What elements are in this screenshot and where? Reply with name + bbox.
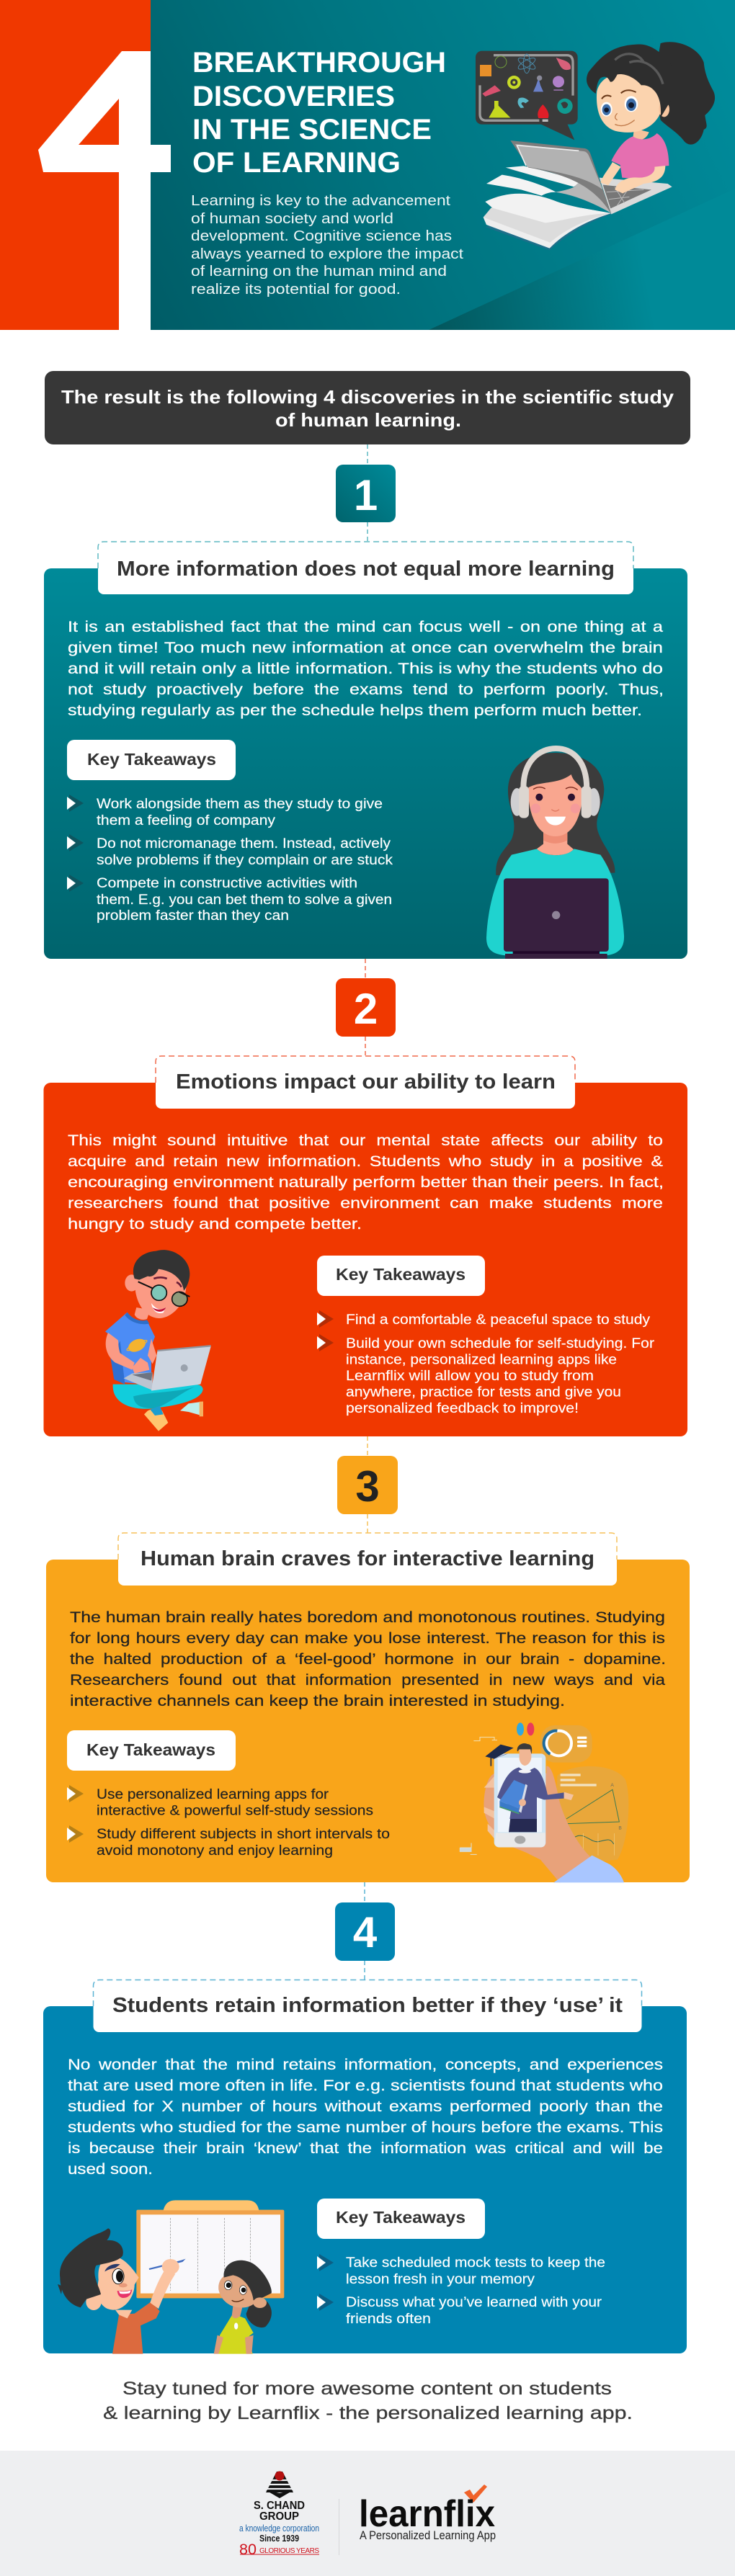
boy	[58, 2228, 179, 2354]
section title 1: More information does not equal more learning	[117, 558, 615, 581]
panel 2: emotions	[43, 1056, 687, 1436]
key takeaways label 2	[317, 1256, 485, 1296]
closing message	[103, 2379, 633, 2423]
panel 4: using information	[43, 1980, 687, 2354]
closing message: Stay tuned for more awesome content on students	[122, 2379, 612, 2399]
key takeaways label 3	[67, 1730, 236, 1771]
paragraph 1: It is an established fact that the mind can focus well - on one thing at a	[68, 619, 663, 635]
illustration: girl with laptop and book	[476, 42, 715, 250]
paragraph 4: studied for X number of hours without exams performed poorly than the	[68, 2098, 663, 2115]
takeaway list 2: Learnflix will allow you to study from	[346, 1369, 594, 1384]
takeaway list 1: problem faster than they can	[97, 908, 289, 923]
takeaway list 3: avoid monotony and enjoy learning	[97, 1843, 333, 1859]
emblem	[266, 2471, 293, 2498]
header title: IN THE SCIENCE	[192, 114, 432, 146]
section title 2	[156, 1056, 575, 1109]
header title: BREAKTHROUGH	[192, 47, 446, 79]
illustration: hand holding phone with teacher: A	[610, 1783, 614, 1788]
intro bar	[45, 371, 690, 444]
takeaway list 1: them a feeling of company	[97, 813, 276, 828]
takeaway list 1: Compete in constructive activities with	[97, 876, 357, 891]
logo: S. Chand Group: GROUP	[259, 2510, 299, 2523]
header title: OF LEARNING	[192, 147, 401, 179]
header banner	[0, 0, 735, 330]
takeaway list 2: personalized feedback to improve!	[346, 1401, 579, 1416]
takeaway list 2: instance, personalized learning apps like	[346, 1353, 617, 1367]
section title 4	[94, 1980, 641, 2032]
paragraph 4: used soon.	[68, 2161, 153, 2178]
takeaway list 1	[67, 795, 393, 923]
takeaway list 1: them. E.g. you can bet them to solve a given	[97, 893, 392, 908]
header title	[192, 47, 446, 179]
takeaway list 2: anywhere, practice for tests and give you	[346, 1385, 621, 1400]
logo: learnflix	[359, 2485, 496, 2542]
number badge 1	[336, 465, 396, 522]
girl	[587, 42, 715, 193]
section title 2: Emotions impact our ability to learn	[176, 1070, 556, 1094]
paragraph 4: students who studied for the same number of hours before the exams. This	[68, 2119, 663, 2136]
paragraph 2: researchers found that positive environment can make students more	[68, 1195, 663, 1212]
paragraph 4: is because their brain ‘knew’ that the information was critical and will be	[68, 2140, 663, 2157]
paragraph 1: not study proactively before the exams tend to perform poorly. Thus,	[68, 681, 664, 698]
number badge 2: 2	[354, 985, 378, 1033]
logo: learnflix: A Personalized Learning App	[360, 2528, 496, 2542]
number badge 1: 1	[354, 471, 378, 519]
paragraph 3: interactive channels can keep the brain interested in studying.	[70, 1693, 565, 1709]
paragraph 4: that are used more often in life. For e.g. scientists found that students who	[68, 2078, 663, 2094]
intro bar: The result is the following 4 discoveries in the scientific study	[61, 386, 674, 408]
header intro text: Learning is key to the advancement	[191, 193, 450, 209]
takeaway list 3: Study different subjects in short intervals to	[97, 1827, 390, 1842]
closing message: & learning by Learnflix - the personalized learning app.	[103, 2403, 633, 2423]
takeaway list 1: Do not micromanage them. Instead, actively	[97, 836, 391, 851]
illustration: woman with headphones and laptop	[486, 748, 624, 959]
header intro text	[191, 193, 463, 298]
takeaway list 4: Take scheduled mock tests to keep the	[346, 2255, 605, 2271]
key takeaways label 4	[317, 2199, 485, 2239]
header intro text: development. Cognitive science has	[191, 228, 452, 244]
section title 4: Students retain information better if they ‘use’ it	[112, 1994, 623, 2017]
paragraph 3: The human brain really hates boredom and monotonous routines. Studying	[70, 1609, 665, 1626]
key takeaways label 2: Key Takeaways	[336, 1265, 466, 1284]
number badge 4: 4	[353, 1908, 378, 1956]
logo: S. Chand Group: Since 1939	[259, 2533, 299, 2544]
paragraph 3: for long hours every day can make you lose interest. The reason for this is	[70, 1630, 665, 1647]
takeaway list 4	[317, 2254, 605, 2327]
takeaway list 2: Find a comfortable & peaceful space to study	[346, 1312, 651, 1328]
takeaway list 4: lesson fresh in your memory	[346, 2272, 535, 2287]
takeaway list 4: Discuss what you’ve learned with your	[346, 2295, 602, 2310]
paragraph 1: studying regularly as per the schedule helps them perform much better.	[68, 702, 642, 719]
panel 3: interactive learning	[46, 1533, 690, 1882]
number badge 2	[336, 978, 396, 1037]
paragraph 4	[68, 2057, 663, 2178]
section title 1	[98, 542, 633, 594]
key takeaways label 3: Key Takeaways	[86, 1740, 215, 1759]
header title: DISCOVERIES	[192, 81, 395, 112]
laptop	[510, 140, 672, 214]
paragraph 2: hungry to study and compete better.	[68, 1216, 362, 1233]
girl	[214, 2260, 272, 2354]
panel 1: more information	[44, 542, 687, 959]
logo: S. Chand Group	[239, 2471, 319, 2558]
header intro text: always yearned to explore the impact	[191, 246, 463, 262]
header intro text: realize its potential for good.	[191, 282, 401, 298]
paragraph 1	[68, 619, 664, 719]
illustration: children at whiteboard	[58, 2200, 284, 2354]
open book	[484, 166, 612, 250]
paragraph 3: the halted production of a ‘feel-good’ hormone in our brain - dopamine.	[70, 1651, 666, 1668]
takeaway list 2	[317, 1310, 655, 1416]
takeaway list 3	[67, 1785, 390, 1859]
header intro text: of learning on the human mind and	[191, 264, 447, 279]
paragraph 4: No wonder that the mind retains information, concepts, and experiences	[68, 2057, 663, 2073]
takeaway list 3: Use personalized learning apps for	[97, 1787, 329, 1802]
takeaway list 1: Work alongside them as they study to give	[97, 797, 383, 812]
speech bubble with science icons	[476, 51, 578, 140]
section title 3	[118, 1533, 617, 1586]
key takeaways label 1	[67, 740, 236, 780]
paragraph 2: acquire and retain new information. Students who study in a positive &	[68, 1153, 663, 1170]
takeaway list 1: solve problems if they complain or are stuck	[97, 853, 393, 868]
section title 3: Human brain craves for interactive learning	[141, 1547, 594, 1570]
logo: S. Chand Group: a knowledge corporation	[239, 2523, 319, 2533]
header intro text: of human society and world	[191, 211, 393, 227]
number badge 3: 3	[355, 1462, 380, 1511]
illustration: boy with laptop	[105, 1250, 211, 1431]
logo: learnflix: learnflix	[359, 2493, 495, 2535]
number badge 4	[335, 1902, 395, 1961]
paragraph 2: encouraging environment naturally perform better than their peers. In fact,	[68, 1174, 664, 1191]
paragraph 3: Researchers found out that information presented in new ways and via	[70, 1672, 665, 1689]
logo: S. Chand Group: GLORIOUS YEARS	[259, 2547, 319, 2555]
intro bar: of human learning.	[275, 409, 461, 431]
illustration: hand holding phone with teacher: B	[618, 1826, 622, 1831]
logo: S. Chand Group: 80	[239, 2541, 257, 2558]
key takeaways label 1: Key Takeaways	[87, 750, 216, 769]
key takeaways label 4: Key Takeaways	[336, 2208, 466, 2227]
big number 4	[38, 51, 171, 330]
takeaway list 3: interactive & powerful self-study sessions	[97, 1804, 373, 1818]
paragraph 3	[70, 1609, 666, 1709]
takeaway list 2: Build your own schedule for self-studying. For	[346, 1336, 655, 1351]
paragraph 2: This might sound intuitive that our mental state affects our ability to	[68, 1132, 663, 1149]
paragraph 1: given time! Too much new information at once can overwhelm the brain	[68, 640, 663, 656]
illustration: hand holding phone with teacher	[460, 1722, 628, 1882]
paragraph 2	[68, 1132, 664, 1233]
footer band	[0, 2451, 735, 2576]
number badge 3	[337, 1456, 398, 1514]
logo: S. Chand Group: S. CHAND	[254, 2500, 305, 2512]
paragraph 1: and it will retain only a little information. This is why the students who do	[68, 661, 663, 677]
takeaway list 4: friends often	[346, 2312, 431, 2327]
